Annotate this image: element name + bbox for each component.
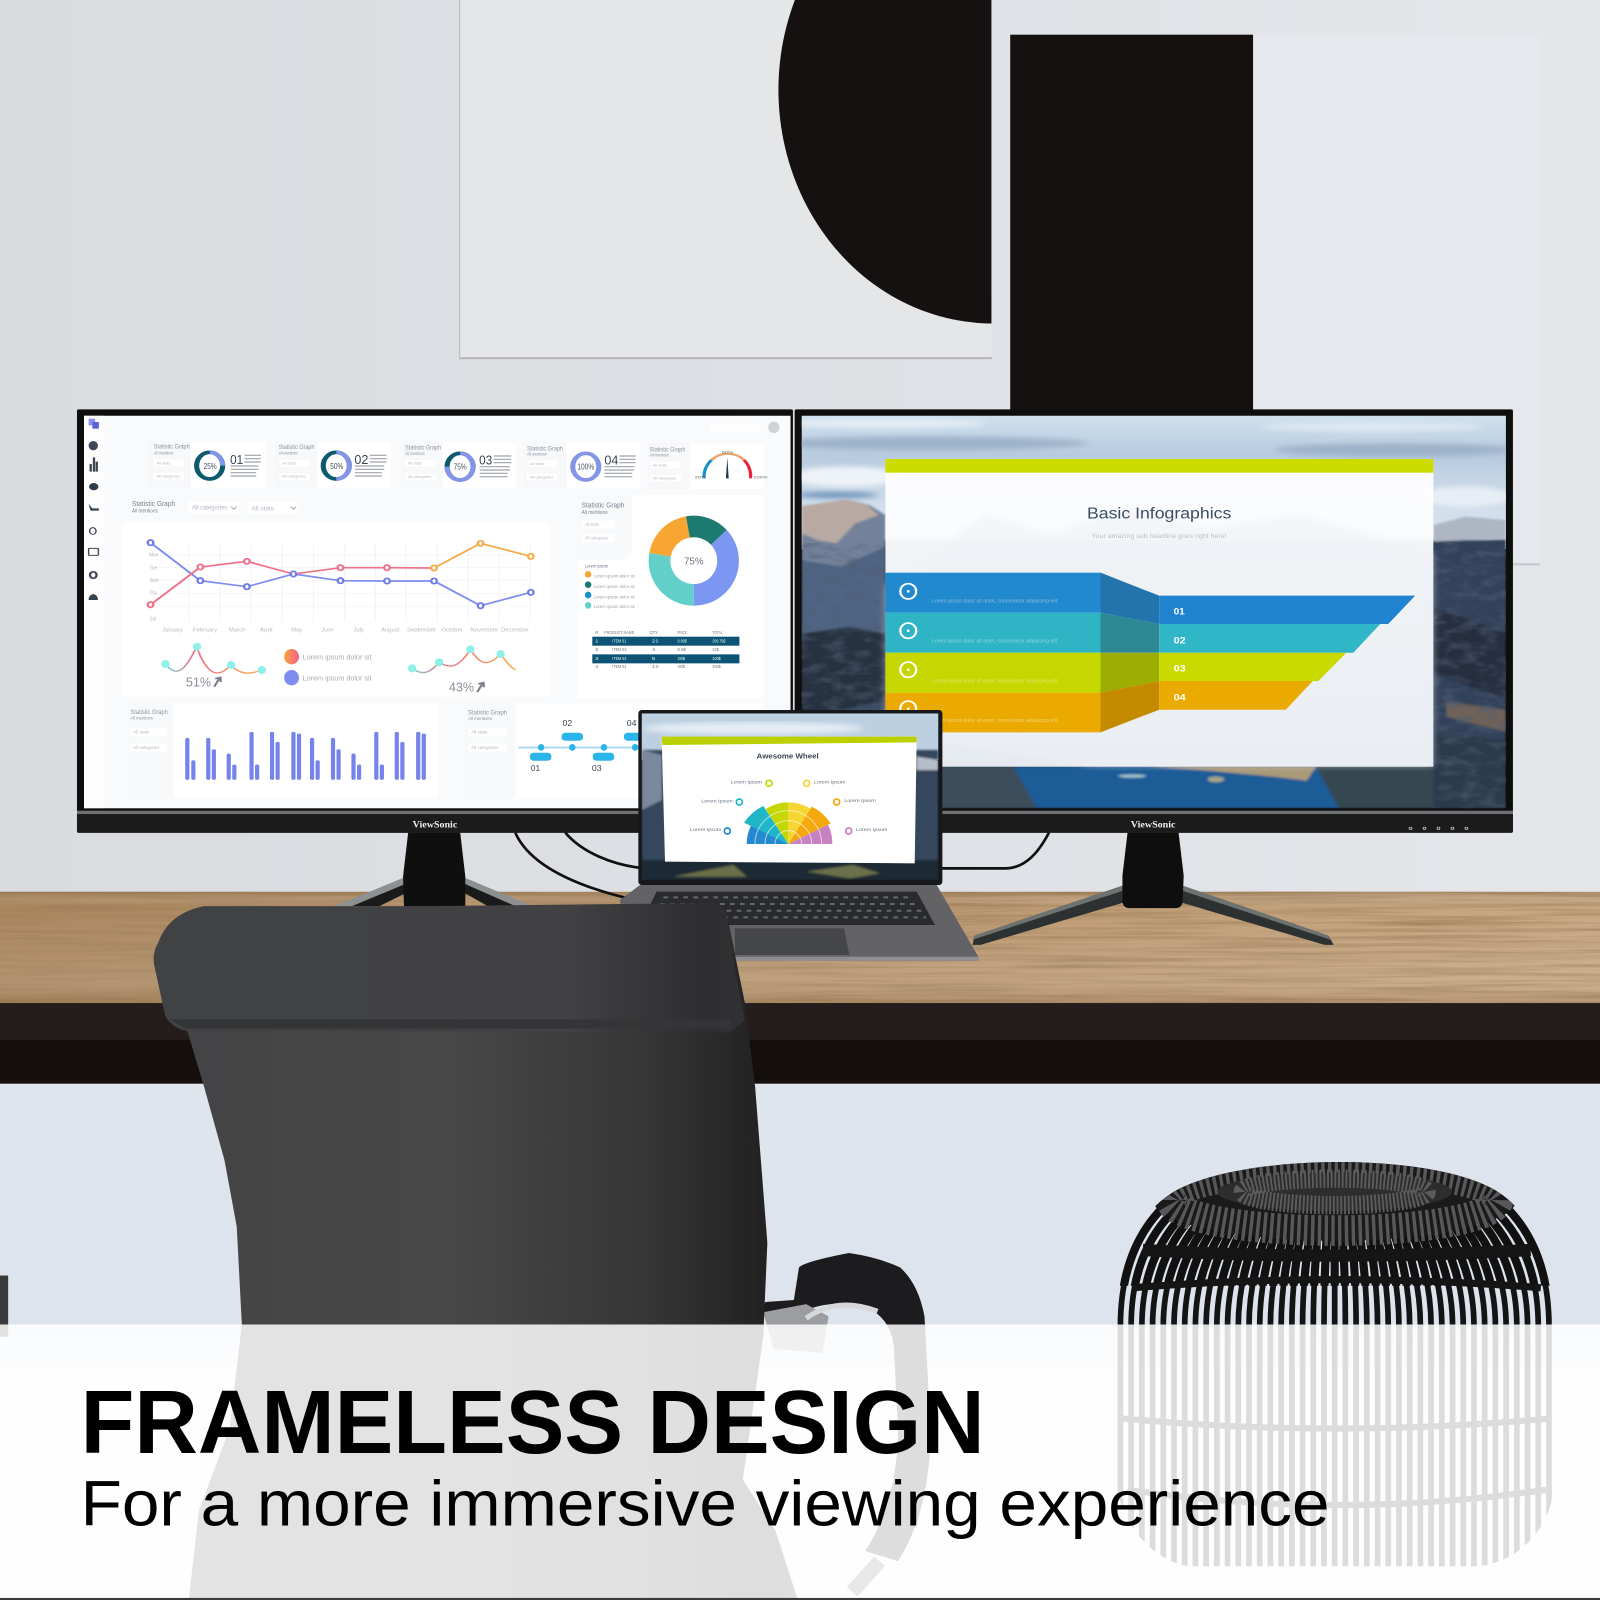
- band captions: Lorem ipsum dolor sit amet, consectetur adipiscing elit.: [932, 599, 1059, 604]
- data table: 209.79$: [712, 639, 725, 644]
- chart markers: [148, 540, 534, 608]
- top card 4: [527, 446, 636, 482]
- top card 2: All categories: [282, 474, 306, 479]
- top card 4: 04: [604, 453, 618, 468]
- data table: TOTAL: [712, 631, 723, 636]
- data table: 12: [652, 665, 659, 670]
- data table: ITEM 01: [612, 639, 626, 644]
- axis labels: October: [441, 627, 464, 633]
- chart legend: Lorem ipsum dolor sit: [303, 653, 372, 661]
- wheel labels: Lorem Ipsum: [856, 827, 888, 832]
- stool upper ribs, denser: [1120, 1207, 1549, 1571]
- keyboard: [640, 892, 935, 925]
- laptop: [620, 710, 978, 961]
- left monitor stand: [335, 833, 533, 908]
- bar chart panel: [130, 710, 426, 780]
- band captions: Lorem ipsum dolor sit amet, consectetur adipiscing elit.: [932, 679, 1059, 684]
- data table: ITEM 03: [612, 657, 626, 662]
- top card 1: All stats: [157, 461, 171, 466]
- timeline panel: 01: [531, 764, 540, 774]
- slide subtitle: Your amazing sub headline goes right here!: [1092, 532, 1227, 540]
- wheel labels: Lorem Ipsum: [844, 798, 876, 803]
- top card 2: Statistic Graph: [279, 443, 314, 451]
- axis labels: September: [407, 627, 436, 633]
- top card 1: Statistic Graph: [154, 443, 190, 450]
- gear icon centres: [907, 590, 910, 710]
- laptop screen: [642, 713, 938, 880]
- search and avatar: [768, 422, 780, 433]
- axis labels: December: [501, 627, 530, 633]
- wall background: [0, 0, 1600, 898]
- timeline panel: All stats: [471, 730, 487, 735]
- top card 4: All categories: [530, 475, 554, 480]
- chair arm: [760, 1253, 931, 1592]
- data table: 5.5$: [677, 648, 686, 653]
- top card 1: All mentions: [154, 451, 174, 456]
- top card 3: All mentions: [405, 452, 425, 457]
- brand label: ViewSonic: [1131, 820, 1175, 830]
- slide title: Basic Infographics: [1087, 505, 1231, 522]
- data table: 2: [595, 648, 599, 653]
- axis labels: November: [470, 627, 499, 633]
- timeline panel: 02: [563, 719, 572, 729]
- laptop lid: [638, 710, 942, 885]
- data table: 22$: [712, 648, 719, 653]
- timeline panel: Statistic Graph: [468, 709, 507, 716]
- wheel labels: Lorem Ipsum: [814, 779, 846, 784]
- band numbers: 01: [1174, 607, 1185, 617]
- axis labels: July: [353, 627, 364, 633]
- right monitor stand: [972, 833, 1334, 945]
- left edge dark object: [0, 1276, 8, 1337]
- top card 3: [405, 445, 512, 482]
- top card 5 gauge: All categories: [653, 476, 677, 481]
- axis labels: Wed: [150, 578, 159, 584]
- data table: [592, 631, 739, 670]
- data table: 5: [652, 657, 655, 662]
- main chart header: All categories: [192, 504, 228, 511]
- laptop base: [620, 885, 978, 961]
- band captions: Lorem ipsum dolor sit amet, consectetur adipiscing elit.: [932, 719, 1059, 724]
- rock texture: [802, 543, 886, 710]
- stool woven band: [1133, 1280, 1541, 1288]
- office chair back: [154, 903, 931, 1600]
- data table: ITEM 04: [612, 665, 626, 670]
- painting: black and white canvas: [1010, 35, 1540, 565]
- wheel chart: [744, 802, 832, 844]
- data table: 480$: [712, 665, 721, 670]
- bottom edge line: [0, 1598, 1600, 1600]
- chin highlight: [795, 811, 1513, 814]
- timeline panel: All mentions: [468, 717, 493, 722]
- slide panel: [885, 459, 1433, 767]
- laptop slide bar: [662, 737, 917, 745]
- axis labels: Sat: [150, 617, 156, 622]
- data table: PRODUCT NAME: [604, 631, 635, 636]
- line chart panel: [146, 539, 535, 692]
- donut panel: All stats: [585, 523, 599, 528]
- left monitor: [77, 409, 793, 833]
- axis labels: August: [381, 627, 400, 633]
- right monitor: [771, 409, 1516, 833]
- donut panel: 75%: [684, 556, 704, 567]
- donut panel: Statistic Graph: [582, 501, 625, 509]
- chair headrest: [154, 903, 745, 1033]
- top card 2: 02: [354, 452, 368, 467]
- heading: frameless design: FRAMELESS DESIGN: [81, 1373, 985, 1473]
- data table: ITEM 02: [612, 648, 626, 653]
- band captions: [932, 599, 1059, 724]
- data table: 3: [595, 657, 599, 662]
- band numbers: 04: [1174, 693, 1186, 703]
- cables: [515, 833, 1049, 900]
- top card 5 gauge: All stats: [653, 463, 667, 468]
- wheel labels: Lorem Ipsum: [731, 780, 762, 785]
- axis labels: June: [321, 627, 334, 633]
- timeline panel: [468, 710, 638, 771]
- axis labels: Mon: [149, 552, 159, 558]
- top card 1: 01: [230, 452, 243, 467]
- axis labels: April: [260, 627, 273, 633]
- wheel labels: Lorem Ipsum: [690, 827, 722, 832]
- top card 4: All stats: [530, 462, 544, 467]
- rock texture right: [1433, 543, 1506, 808]
- axis labels: May: [291, 627, 303, 633]
- laptop slide title: Awesome Wheel: [757, 751, 819, 760]
- data table: 9.99$: [677, 639, 687, 644]
- top card 3: All categories: [408, 475, 432, 480]
- band numbers: [1174, 607, 1186, 703]
- donut legend: [585, 564, 635, 610]
- donut chart: [649, 516, 739, 606]
- monitor frame: [77, 409, 793, 833]
- band gear icons: [900, 584, 916, 716]
- timeline panel: 04: [627, 719, 637, 729]
- top card 4: 100%: [577, 463, 594, 472]
- donut panel: All categories: [585, 536, 608, 541]
- chart legend: [284, 649, 372, 685]
- band numbers: 02: [1174, 636, 1186, 646]
- top card 1: 25%: [204, 462, 217, 471]
- data table: 100$: [712, 657, 721, 662]
- main chart header: All mentions: [132, 509, 158, 514]
- data table: 21: [652, 639, 659, 644]
- sparkline left: 51%: [186, 676, 211, 690]
- donut panel: All mentions: [582, 511, 608, 516]
- sidebar icons: [89, 419, 99, 600]
- top card 3: 03: [479, 453, 492, 468]
- main chart header: Statistic Graph: [132, 499, 175, 508]
- chin highlight: [77, 811, 793, 814]
- bar chart panel: All mentions: [131, 716, 153, 721]
- top card 1: [154, 444, 261, 481]
- chart legend: Lorem ipsum dolor sit: [303, 674, 372, 682]
- sparkline right: [408, 645, 515, 695]
- stool ribs: [1120, 1207, 1549, 1571]
- axis labels: [149, 552, 530, 633]
- chair seam: [169, 1019, 731, 1029]
- wheel markers: [724, 780, 852, 834]
- band captions: Lorem ipsum dolor sit amet, consectetur adipiscing elit.: [932, 639, 1059, 644]
- stool dome top: [1153, 1159, 1516, 1241]
- desk: [0, 892, 1600, 1084]
- chin: [795, 813, 1513, 833]
- data table: PRICE: [677, 631, 687, 636]
- top card 3: Statistic Graph: [405, 444, 441, 451]
- top card 2: 50%: [330, 462, 343, 471]
- axis labels: Tue: [150, 565, 157, 571]
- wheel labels: [690, 779, 888, 832]
- rattan stool: [1120, 1159, 1551, 1571]
- timeline panel: 03: [592, 764, 602, 774]
- translucent caption panel: [0, 1324, 1600, 1598]
- top card 2: All mentions: [279, 451, 298, 456]
- touchpad: [735, 928, 849, 955]
- main chart header: [132, 500, 296, 512]
- screen wallpaper: mountains: [771, 416, 1516, 808]
- axis labels: Thu: [150, 591, 157, 596]
- lower wall under the desk: [0, 1082, 1600, 1367]
- data table: 4: [652, 648, 655, 653]
- donut legend: Lorem ipsum dolor sit: [594, 595, 635, 600]
- axis labels: March: [229, 627, 246, 633]
- donut legend: Lorem ipsum dolor sit: [594, 605, 635, 610]
- data table: 4: [595, 665, 599, 670]
- top card 4: Statistic Graph: [527, 445, 563, 452]
- top card 2: All stats: [282, 461, 297, 466]
- data table: 40$: [677, 665, 685, 670]
- control buttons: [1409, 827, 1468, 830]
- floor: [0, 1367, 1600, 1600]
- bar chart panel: Statistic Graph: [131, 708, 168, 716]
- chin: [77, 813, 793, 833]
- dashboard screen: [84, 416, 791, 808]
- monitor frame: [795, 409, 1513, 833]
- donut legend: Lorem ipsum: [585, 564, 609, 569]
- subheading: For a more immersive viewing experience: [81, 1468, 1330, 1540]
- top card 3: All stats: [408, 461, 422, 466]
- data table: QTY: [650, 631, 658, 636]
- main chart header: All stats: [252, 505, 274, 512]
- top card 5 gauge: 20%: [695, 475, 707, 480]
- laptop slide: [662, 737, 917, 863]
- top card 1: All categories: [157, 474, 180, 479]
- donut legend: Lorem ipsum dolor sit: [594, 585, 635, 590]
- data table: #: [595, 631, 599, 636]
- chart lines: [151, 543, 531, 606]
- wheel labels: Lorem Ipsum: [701, 798, 733, 803]
- brand label: ViewSonic: [413, 820, 457, 830]
- data table: 1: [595, 639, 599, 644]
- top card 5 gauge: 100%: [753, 475, 768, 480]
- band numbers: 03: [1174, 664, 1186, 674]
- top card 5 gauge: [650, 447, 768, 480]
- top card 3: 75%: [454, 462, 467, 472]
- top card 5 gauge: Statistic Graph: [650, 446, 685, 453]
- bar chart panel: All categories: [133, 746, 160, 751]
- bar chart panel: All stats: [133, 730, 149, 735]
- donut legend: Lorem ipsum dolor sit: [594, 574, 635, 579]
- sparkline left: [161, 643, 266, 690]
- slide header bar: [885, 459, 1433, 473]
- data table: 20$: [677, 657, 685, 662]
- timeline panel: All categories: [471, 746, 499, 751]
- chair body: [186, 903, 798, 1600]
- top card 4: All mentions: [527, 452, 547, 457]
- donut panel: [582, 502, 740, 668]
- axis labels: February: [193, 627, 218, 633]
- sparkline right: 43%: [449, 681, 474, 695]
- infographic bands: [885, 573, 1415, 732]
- axis labels: January: [162, 627, 183, 633]
- top card 5 gauge: All mentions: [650, 453, 669, 458]
- top card 2: [278, 444, 386, 481]
- painting: canvas with black half circle: [459, 0, 992, 359]
- top card 5 gauge: 60%: [722, 450, 734, 455]
